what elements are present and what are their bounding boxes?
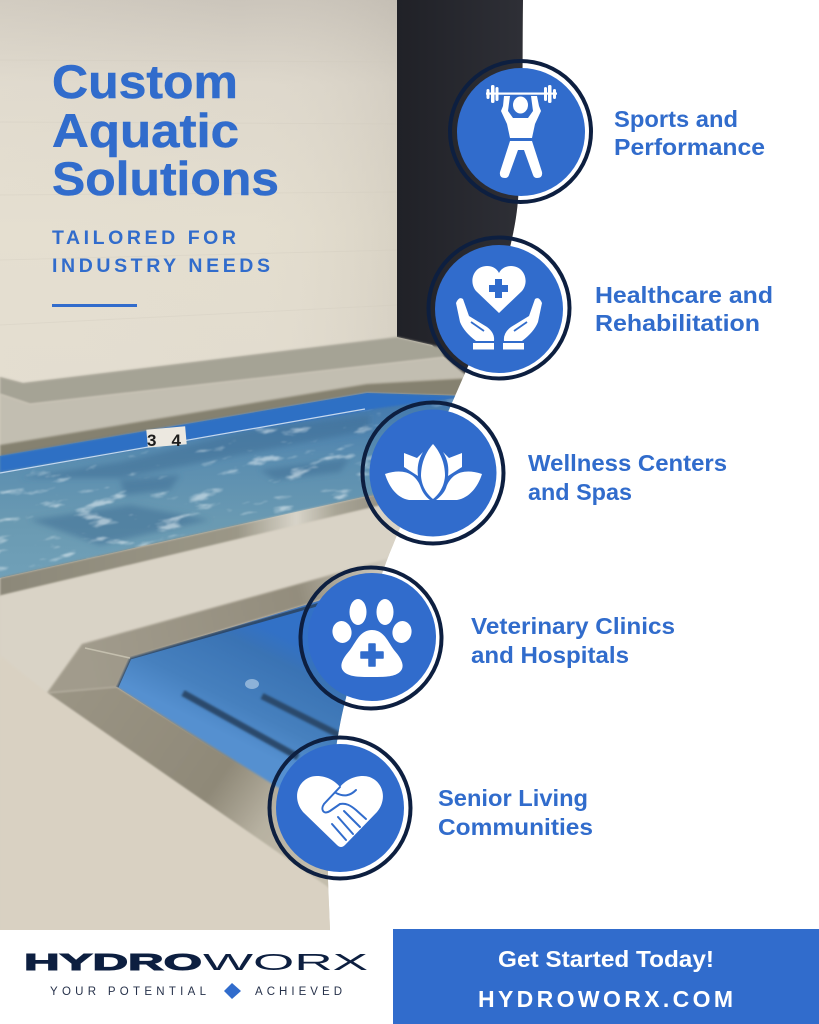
lower pool metal top edge: [47, 558, 395, 693]
photo base deck: [0, 0, 530, 930]
darker water patches: [20, 415, 370, 545]
label: wellness centers and spas: Wellness Centers: [528, 450, 727, 476]
label: healthcare and rehabilitation: Rehabilitation: [595, 310, 760, 336]
label: senior living communities: Communities: [438, 814, 593, 840]
lower pool lane lines: [183, 693, 345, 757]
lower pool metal front edge: [48, 686, 328, 888]
logo tagline: ACHIEVED: [255, 986, 342, 998]
label: veterinary clinics and hospitals: [471, 613, 675, 668]
item: wellness centers and spas: [362, 402, 504, 544]
title underline: [52, 304, 137, 307]
badge ring: [362, 402, 504, 544]
logo wordmark: WORX: [203, 949, 369, 975]
lower pool water: [117, 600, 346, 790]
item: healthcare and rehabilitation: [428, 238, 570, 378]
label: wellness centers and spas: [528, 450, 727, 505]
photo: aquatic therapy pools: [0, 0, 530, 935]
wall side shading: [370, 27, 397, 338]
badge ring: [450, 61, 591, 202]
cta panel: [393, 929, 819, 1024]
badge ring: [300, 568, 442, 708]
dark curtain wall: [397, 0, 523, 376]
lower-left deck: [47, 693, 330, 928]
label: wellness centers and spas: and Spas: [528, 479, 632, 505]
corner seam: [85, 648, 130, 658]
label: veterinary clinics and hospitals: and Hospitals: [471, 642, 629, 668]
label: healthcare and rehabilitation: [595, 282, 773, 336]
label: healthcare and rehabilitation: Healthcare and: [595, 282, 773, 308]
front metal edge upper pool: [0, 490, 395, 596]
pool drain: [245, 679, 259, 689]
depth marker 3ft 4in: [146, 426, 187, 450]
label: sports and performance: Performance: [614, 134, 765, 160]
upper pool blue back wall: [0, 393, 460, 472]
title: Aquatic: [52, 104, 239, 157]
title: [52, 55, 279, 205]
logo diamond: [224, 983, 241, 999]
back ledge: [0, 357, 470, 447]
item: sports and performance: [450, 61, 591, 202]
title: Solutions: [52, 152, 279, 205]
cream block wall: [0, 0, 397, 383]
label: senior living communities: Senior Living: [438, 785, 588, 811]
icon: paw with cross: [330, 599, 414, 677]
label: sports and performance: [614, 106, 765, 160]
subtitle: [52, 227, 270, 277]
icon: lotus flower: [385, 444, 482, 500]
title: Custom: [52, 55, 238, 108]
wall shadow band: [0, 337, 445, 404]
footer logo: Hydroworx: [24, 949, 369, 999]
lower pool dark inner edge: [117, 604, 320, 687]
subtitle: INDUSTRY NEEDS: [52, 255, 270, 277]
logo tagline: YOUR POTENTIAL: [50, 986, 207, 998]
icon: heart with handshake: [297, 776, 383, 847]
item: veterinary clinics and hospitals: [300, 568, 442, 708]
badge disc: [308, 573, 436, 701]
logo tagline: [50, 986, 342, 998]
badge disc: [435, 245, 563, 373]
back metal edge: [0, 378, 470, 457]
wall mortar lines: [0, 60, 397, 325]
item: senior living communities: [270, 738, 410, 878]
badge disc: [457, 68, 585, 196]
label: sports and performance: Sports and: [614, 106, 738, 132]
icon: heart in caring hands: [456, 266, 542, 350]
water waterline: [0, 409, 365, 473]
subtitle: TAILORED FOR: [52, 227, 236, 249]
water foam texture: [0, 398, 454, 572]
logo wordmark: [24, 949, 369, 975]
middle deck: [0, 505, 400, 597]
cta website: HYDROWORX.COM: [478, 986, 733, 1012]
badge ring: [428, 238, 570, 378]
badge disc: [370, 410, 496, 536]
badge ring: [270, 738, 410, 878]
upper pool water: [0, 393, 470, 578]
depth marker 3ft 4in: 3 4: [147, 431, 182, 450]
icon: weightlifter: [486, 85, 557, 178]
label: senior living communities: [438, 785, 593, 840]
logo wordmark: HYDRO: [24, 949, 202, 975]
label: veterinary clinics and hospitals: Veterinary Clinics: [471, 613, 675, 639]
badge disc: [276, 744, 404, 872]
footer call to action: [393, 929, 819, 1024]
cta heading: Get Started Today!: [498, 946, 714, 972]
